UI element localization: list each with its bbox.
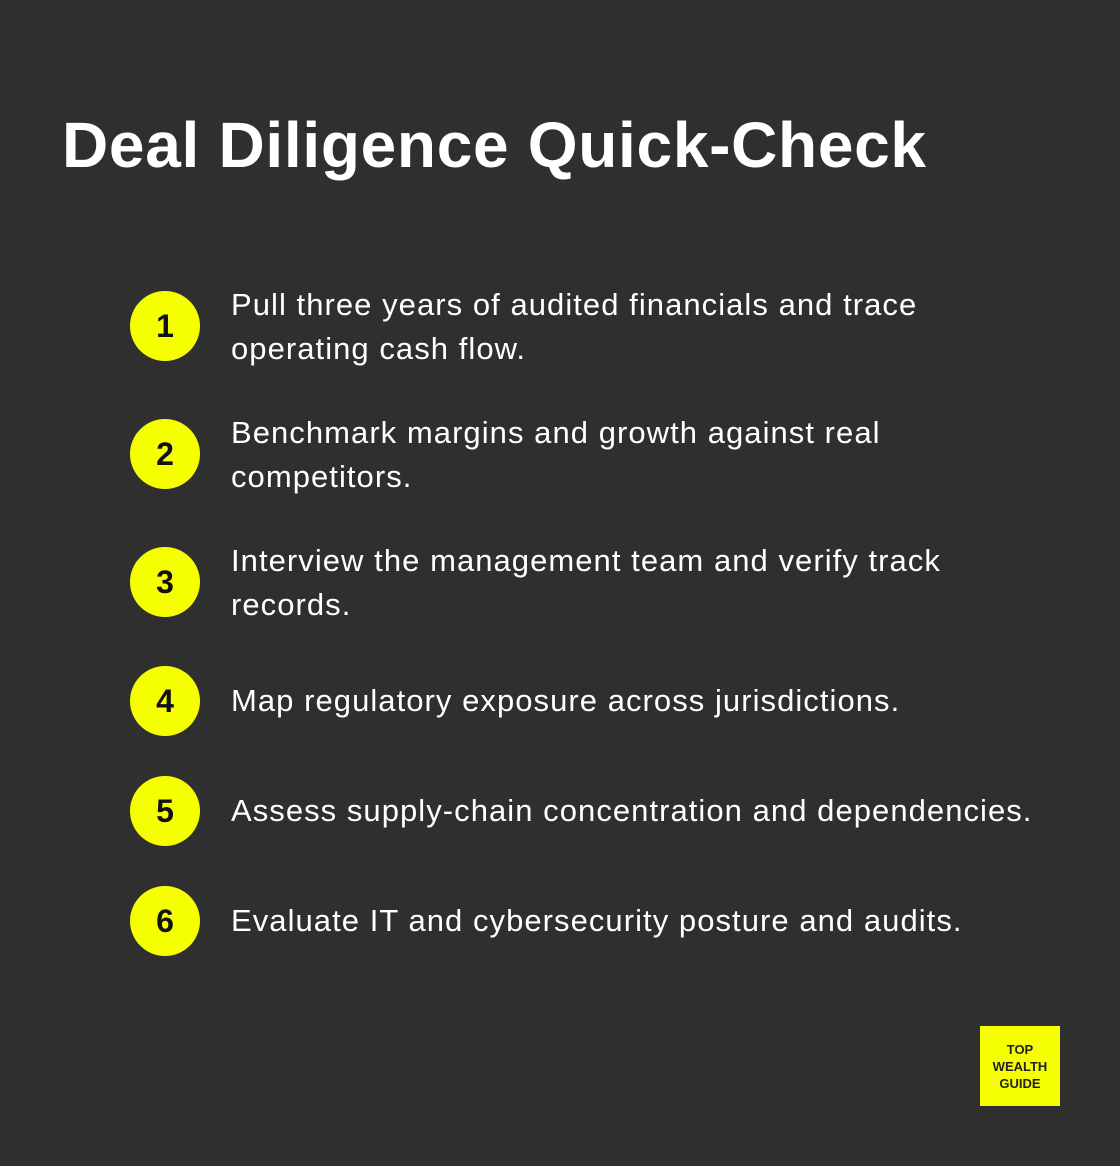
item 5: 5	[156, 793, 174, 829]
title: Deal Diligence Quick-Check	[62, 109, 927, 181]
item 6: Evaluate IT and cybersecurity posture and audits.	[231, 903, 963, 938]
item 3: Interview the management team and verify track	[231, 543, 941, 578]
item 1: 1	[156, 308, 174, 344]
item 2	[130, 415, 881, 494]
item 6: 6	[156, 903, 174, 939]
item 4: 4	[156, 683, 174, 719]
item 4: Map regulatory exposure across jurisdictions.	[231, 683, 900, 718]
logo: WEALTH	[993, 1058, 1047, 1074]
item 1	[130, 287, 917, 366]
logo: GUIDE	[999, 1076, 1041, 1090]
item 5: Assess supply-chain concentration and dependencies.	[231, 793, 1032, 828]
item 5	[130, 776, 1032, 846]
item 1: Pull three years of audited financials and trace	[231, 287, 917, 322]
logo: TOP	[1007, 1042, 1033, 1056]
item 6	[130, 886, 963, 956]
item 2: Benchmark margins and growth against real	[231, 415, 881, 450]
item 2: 2	[156, 436, 174, 472]
item 4	[130, 666, 900, 736]
item 3: records.	[231, 587, 351, 622]
item 2: competitors.	[231, 459, 412, 494]
logo	[980, 1026, 1060, 1106]
item 3	[130, 543, 941, 622]
item 1: operating cash flow.	[231, 331, 526, 366]
item 3: 3	[156, 564, 174, 600]
